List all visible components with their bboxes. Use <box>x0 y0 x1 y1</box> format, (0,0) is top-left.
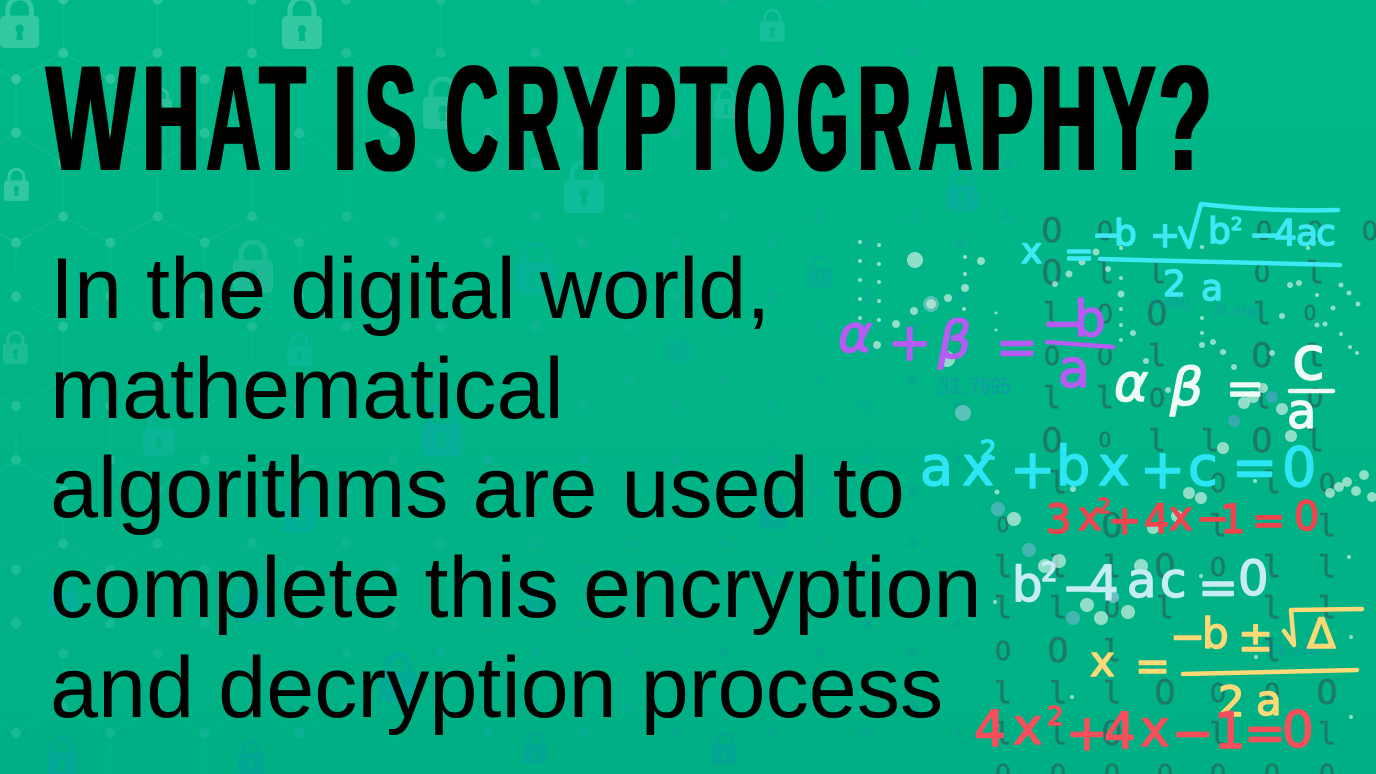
title: Y <box>563 34 618 202</box>
equation: quadratic formula (cyan): 2 <box>1163 264 1186 305</box>
equation: delta root formula (yellow) <box>1090 609 1362 726</box>
title: A <box>206 34 261 202</box>
equation: quadratic formula (cyan) <box>1021 204 1340 309</box>
equation: quadratic formula (cyan): a <box>1201 268 1223 309</box>
title: W <box>46 34 135 202</box>
title: S <box>365 34 416 202</box>
background: dots <box>858 240 1376 719</box>
equation: sum of roots (purple): α+β <box>838 305 971 373</box>
equation: product of roots (white): c <box>1292 324 1325 394</box>
background: blue decimal numbers: 33.7695 <box>939 375 1011 402</box>
equation: pink quadratic: 4x+4x−1=0 <box>974 698 1314 762</box>
title: G <box>797 34 848 202</box>
title: R <box>506 34 560 202</box>
equation: sum of roots (purple) <box>838 290 1113 400</box>
title <box>44 34 1211 202</box>
equation: product of roots (white): = <box>1226 361 1265 415</box>
equation: general quadratic (cyan): ax+bx+c=0 <box>920 435 1316 501</box>
equation: delta root formula (yellow): x=−b±Δ <box>1090 609 1336 690</box>
body text: In the digital world, <box>50 241 770 337</box>
background: hexagon network <box>0 0 1020 774</box>
equation: general quadratic (cyan): 2 <box>980 436 997 466</box>
background: blue decimal numbers: 78.5406 <box>1271 641 1321 662</box>
background: blue decimal numbers: 0.8041 <box>1150 293 1193 315</box>
equation: quadratic formula (cyan): 2 <box>1231 214 1242 235</box>
background: padlock icons <box>0 0 978 774</box>
equation: discriminant (light blue): b−4ac=0 <box>1012 551 1269 616</box>
title: Y <box>1102 34 1156 202</box>
body text: mathematical <box>50 341 564 437</box>
title: H <box>143 34 199 202</box>
equation: sum of roots (purple): =−b <box>996 290 1106 376</box>
background: blue decimal numbers: 32.9806 <box>1211 301 1262 324</box>
equation: red quadratic: 3x+4x−1=0 <box>1046 494 1319 544</box>
background: binary digits: llllllllllllllllllllllllllllllllllll <box>994 256 1336 752</box>
equation: sum of roots (purple): a <box>1058 340 1090 400</box>
title: T <box>681 34 726 202</box>
title: R <box>858 34 911 202</box>
title: P <box>980 34 1033 202</box>
background: blue decimal numbers <box>939 293 1321 662</box>
background: binary digits: 000 <box>997 301 1316 537</box>
equation: product of roots (white) <box>1114 324 1333 440</box>
equation: product of roots (white): αβ <box>1114 354 1203 418</box>
equation: pink quadratic: 2 <box>1047 702 1064 732</box>
title: I <box>334 34 356 202</box>
equation: delta root formula (yellow): 2 <box>1218 677 1245 726</box>
title: O <box>734 34 785 202</box>
body text: algorithms are used to <box>50 440 905 536</box>
equation: quadratic formula (cyan): x=−b+b−4ac <box>1021 211 1336 275</box>
title: ? <box>1159 34 1211 202</box>
equation: red quadratic: 2 <box>1098 494 1111 518</box>
title: T <box>260 34 305 202</box>
title: P <box>623 34 676 202</box>
title: H <box>1041 34 1097 202</box>
title: C <box>446 34 497 202</box>
equation: product of roots (white): a <box>1287 384 1316 440</box>
equation: discriminant (light blue): 2 <box>1041 558 1058 588</box>
background: binary digits: 000000000000 <box>1041 211 1338 754</box>
equation: delta root formula (yellow): a <box>1256 676 1282 725</box>
body text: and decryption process <box>50 640 943 736</box>
title: A <box>918 34 973 202</box>
body text: complete this encryption <box>50 540 982 636</box>
